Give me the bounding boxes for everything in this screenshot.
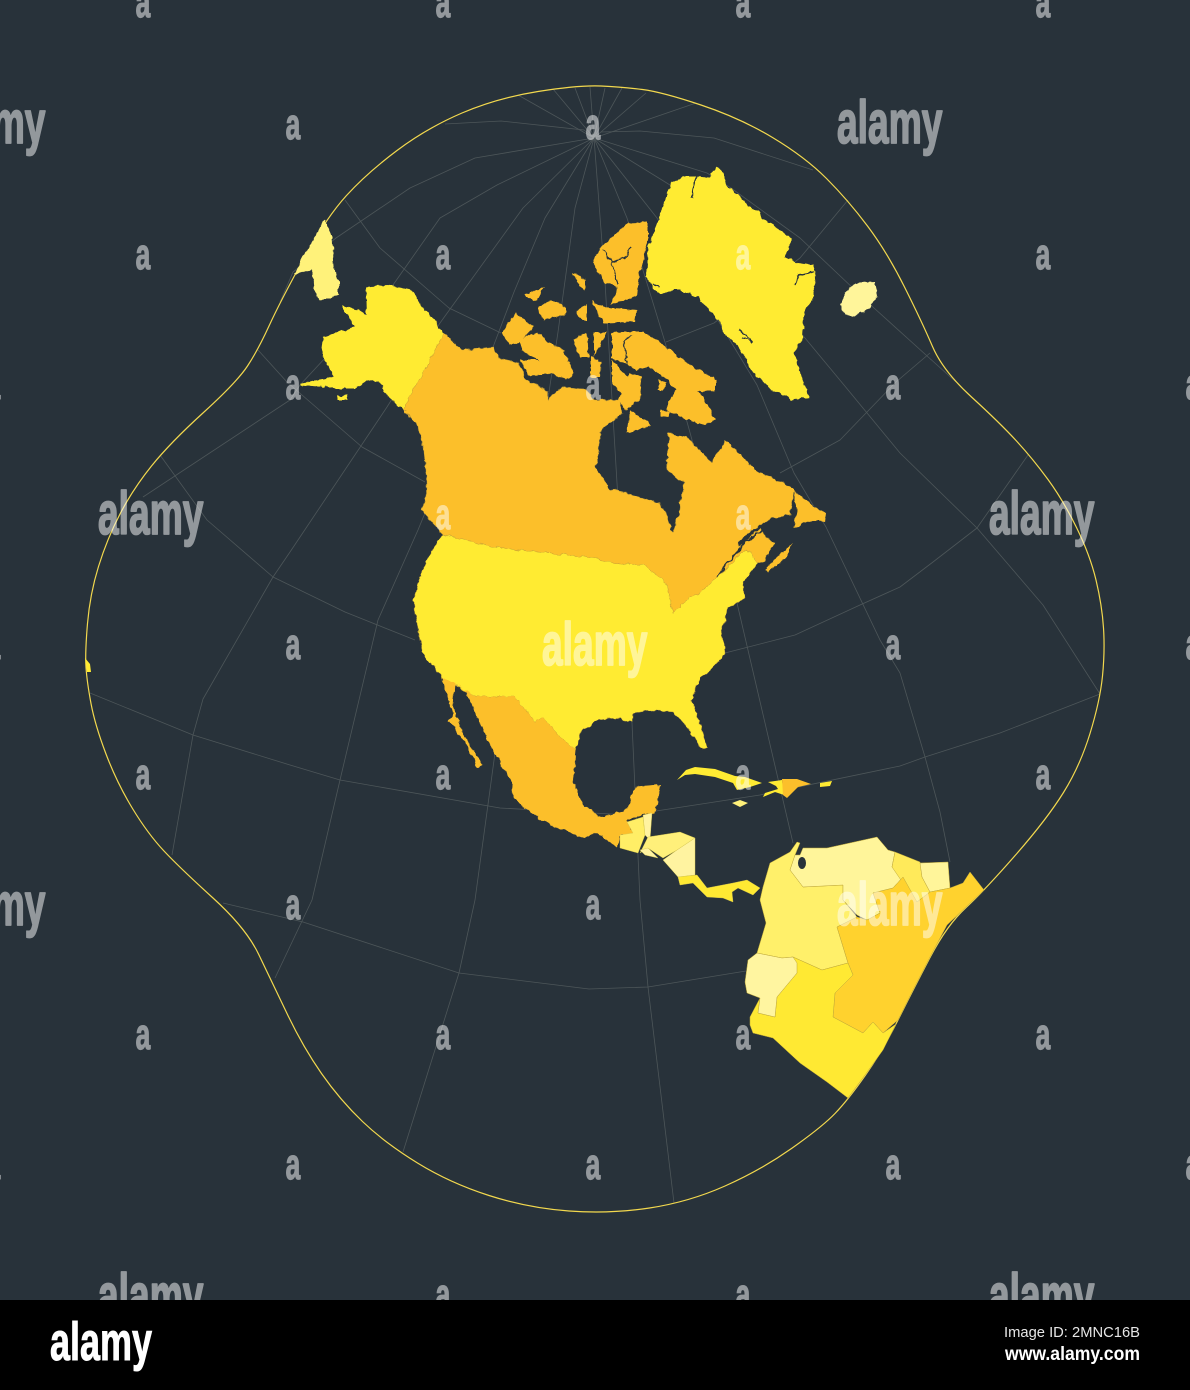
united states xyxy=(413,535,758,750)
belize xyxy=(643,813,652,840)
watermarks: small: a xyxy=(586,1139,601,1189)
ellesmere fjords xyxy=(603,248,632,370)
hawaii xyxy=(85,658,91,672)
cuba xyxy=(677,767,762,790)
kodiak island xyxy=(337,395,348,400)
watermarks: small: a xyxy=(886,1139,901,1189)
lake maracaibo xyxy=(798,857,806,869)
greenland fjords xyxy=(652,177,814,342)
footer logo: alamy xyxy=(50,1312,152,1372)
guatemala xyxy=(620,817,645,853)
projection outline xyxy=(86,86,1104,1212)
baja california xyxy=(442,678,482,767)
watermarks: small: a xyxy=(286,879,301,929)
watermarks: small: a xyxy=(136,749,151,799)
suriname and french guiana xyxy=(920,862,950,892)
watermarks: small: a xyxy=(886,619,901,669)
watermarks: small: a xyxy=(286,619,301,669)
watermarks: large: alamy xyxy=(837,871,943,938)
image id: Image ID: 2MNC16B xyxy=(1004,1324,1140,1341)
honduras xyxy=(640,832,695,858)
watermarks: small: a xyxy=(136,1009,151,1059)
graticule grid lines xyxy=(90,87,1100,1203)
jamaica xyxy=(732,800,748,807)
watermarks: small: a xyxy=(136,229,151,279)
costa rica and panama xyxy=(678,875,760,902)
watermarks: small: a xyxy=(886,359,901,409)
alaska xyxy=(301,285,444,410)
st lawrence estuary xyxy=(717,530,763,577)
watermarks: large: alamy xyxy=(837,89,943,156)
colombia xyxy=(757,842,857,970)
peru and bolivia region xyxy=(750,957,896,1098)
watermarks: small: a xyxy=(586,879,601,929)
watermarks: small: a xyxy=(436,749,451,799)
watermarks: small: a xyxy=(436,489,451,539)
watermarks: small: a xyxy=(286,99,301,149)
mexico mainland xyxy=(455,683,660,848)
watermarks: large: alamy xyxy=(542,611,648,678)
puerto rico xyxy=(820,781,832,787)
haiti xyxy=(763,780,784,797)
watermarks: large: alamy xyxy=(98,480,204,547)
chukotka xyxy=(294,220,339,300)
watermarks: small: a xyxy=(286,359,301,409)
el salvador xyxy=(640,848,658,858)
watermarks: large: alamy xyxy=(98,1262,204,1329)
watermarks: small: a xyxy=(286,1139,301,1189)
dominican republic xyxy=(782,779,811,798)
watermarks: small: a xyxy=(736,1009,751,1059)
north america countries xyxy=(294,165,878,848)
watermarks: small: a xyxy=(436,229,451,279)
canadian arctic islands xyxy=(501,222,716,433)
watermarks: large: alamy xyxy=(989,480,1095,547)
website: www.alamy.com xyxy=(1004,1344,1140,1365)
watermarks: small: a xyxy=(736,749,751,799)
watermarks: small: a xyxy=(1036,229,1051,279)
south america countries xyxy=(745,837,984,1098)
watermarks: small: a xyxy=(736,1269,751,1319)
nicaragua xyxy=(663,838,695,877)
watermarks: small: a xyxy=(736,229,751,279)
watermarks: small: a xyxy=(586,359,601,409)
newfoundland xyxy=(794,490,826,528)
footer bar xyxy=(0,1300,1190,1390)
greenland xyxy=(646,165,816,400)
watermarks: large: alamy xyxy=(989,1262,1095,1329)
venezuela xyxy=(790,837,903,920)
central america and caribbean xyxy=(620,767,832,902)
watermarks: small: a xyxy=(586,99,601,149)
brazil xyxy=(833,872,984,1033)
canada mainland xyxy=(403,333,794,613)
ecuador xyxy=(745,953,797,1017)
watermarks: small: a xyxy=(1036,1009,1051,1059)
watermarks: small: a xyxy=(436,1269,451,1319)
guyana xyxy=(892,852,930,902)
watermarks: small: a xyxy=(1036,749,1051,799)
watermarks: small: a xyxy=(436,1009,451,1059)
iceland xyxy=(840,282,878,316)
watermarks: small: a xyxy=(736,489,751,539)
nova scotia xyxy=(765,543,793,573)
